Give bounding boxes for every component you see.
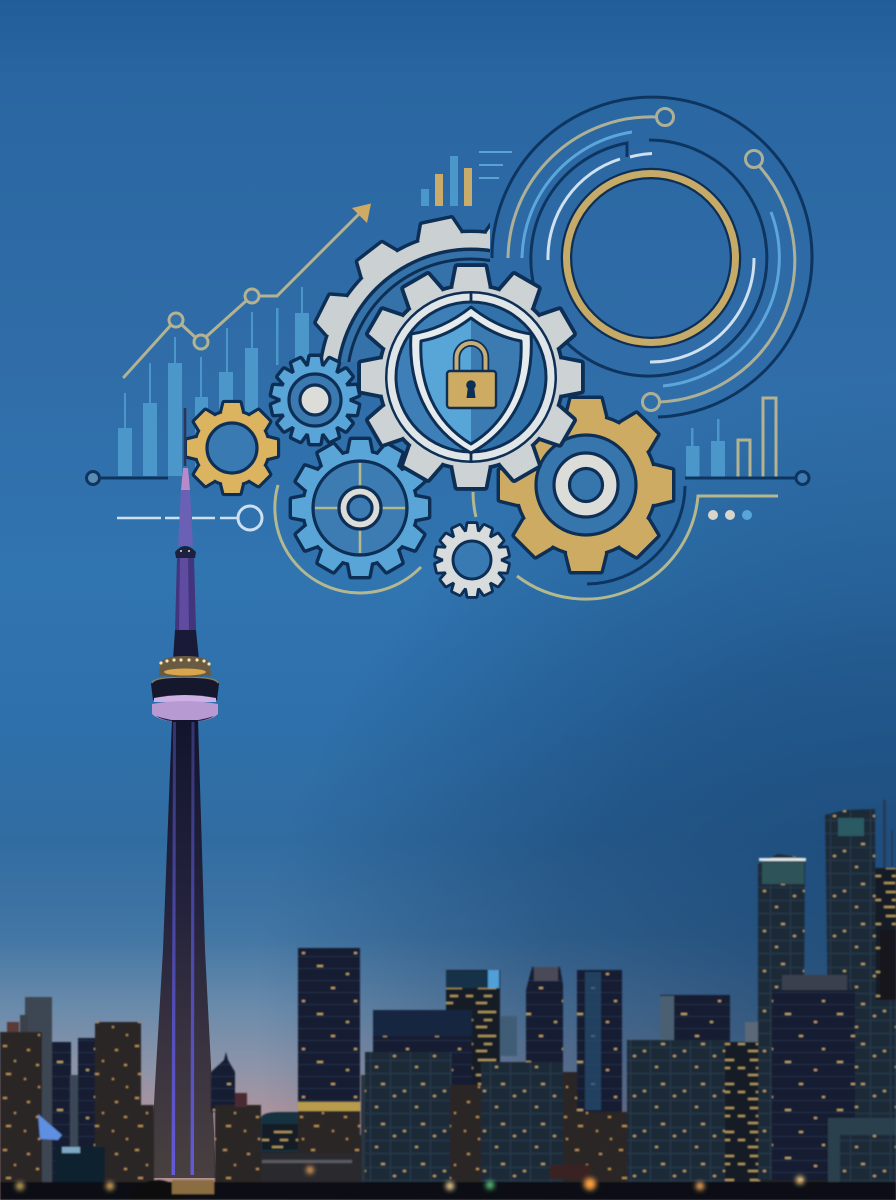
gear: small white bottom xyxy=(436,524,508,596)
gear: small blue top xyxy=(272,357,358,443)
infographic: gears and security diagram xyxy=(86,97,812,599)
baseline left xyxy=(86,472,168,484)
mid-left towers xyxy=(211,948,360,1190)
left towers xyxy=(0,997,154,1200)
trend line with arrow xyxy=(124,204,371,377)
city skyline xyxy=(0,800,896,1200)
three dots xyxy=(708,510,752,520)
bar chart right with baseline xyxy=(685,398,809,484)
security shield xyxy=(411,307,531,453)
CN Tower xyxy=(150,408,219,1178)
gear: medium blue with crosshair xyxy=(292,440,428,576)
gear: large gold xyxy=(500,399,672,571)
gear: big partial gray ring xyxy=(313,215,490,362)
candlestick bar chart left xyxy=(118,287,309,476)
mini bar chart top xyxy=(421,152,512,206)
lower arcs and connector lines xyxy=(117,485,778,599)
tower shaft xyxy=(150,720,216,1178)
gear: main gray with shield xyxy=(361,267,581,487)
waterfront ground and street lights xyxy=(0,1160,896,1200)
low backing of the skyline xyxy=(0,1135,896,1185)
spire xyxy=(175,408,196,630)
concentric circular rings xyxy=(492,97,812,417)
padlock icon xyxy=(447,343,496,408)
right towers xyxy=(627,800,896,1190)
observation pod xyxy=(151,630,219,722)
centre towers xyxy=(361,967,628,1190)
gear: small gold left xyxy=(187,403,277,493)
